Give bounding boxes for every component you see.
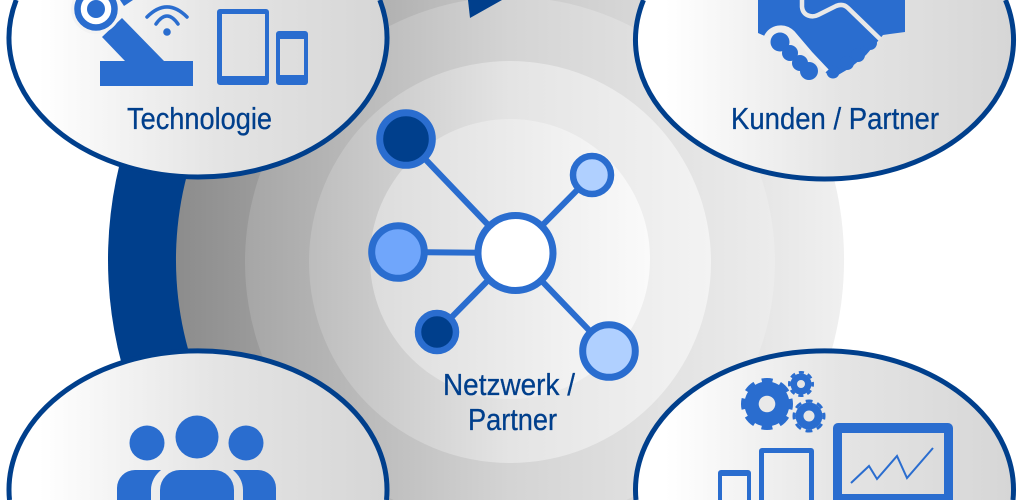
network icon <box>372 113 635 377</box>
bubble: Technologie <box>9 0 387 177</box>
icon: team <box>117 416 276 500</box>
arrow head <box>468 0 502 18</box>
concentric grey rings <box>176 0 844 500</box>
icon: monitor with chart <box>833 423 953 500</box>
icon: phone <box>718 470 751 500</box>
label: Kunden / Partner: Kunden / Partner <box>731 101 939 136</box>
icon: wifi <box>147 7 187 36</box>
icon: phone <box>276 31 308 85</box>
icon: tablet <box>217 9 269 85</box>
label: Netzwerk / Partner <box>443 367 575 437</box>
bubble: people <box>9 351 387 500</box>
bubble: processes <box>636 351 1014 500</box>
icon: gears <box>743 372 824 431</box>
label: Netzwerk / Partner: Netzwerk / <box>443 367 575 402</box>
icon: robot arm <box>71 0 193 86</box>
icon: handshake <box>758 0 905 80</box>
label: Technologie: Technologie <box>127 101 272 136</box>
bubble: Kunden / Partner <box>635 0 1014 179</box>
icon: tablet <box>759 448 814 500</box>
blue cycle arrow <box>108 0 470 500</box>
label: Netzwerk / Partner: Partner <box>468 402 557 437</box>
